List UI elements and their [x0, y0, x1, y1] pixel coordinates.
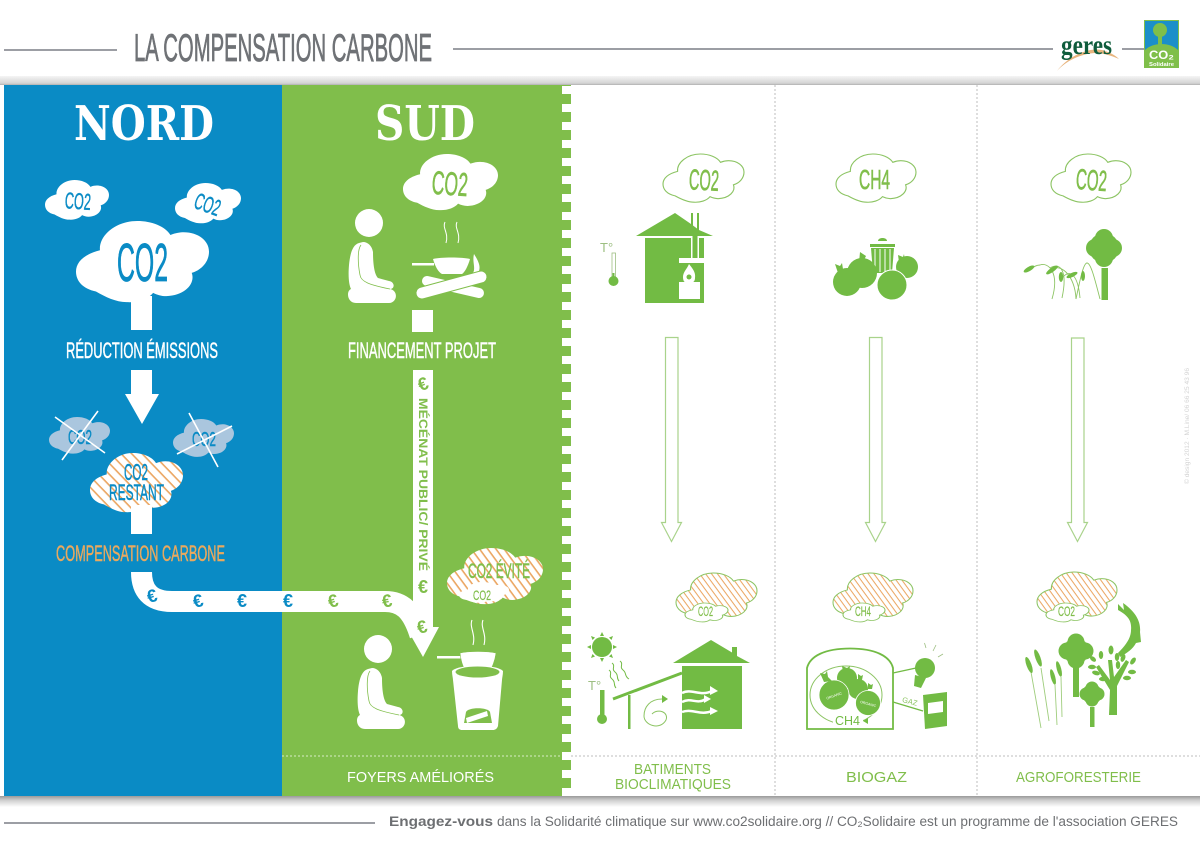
icon: thermometer, solar lean-to: T° — [588, 678, 601, 693]
euro symbols: € — [326, 590, 340, 612]
cloud: CO2 évité: CO2 — [473, 587, 491, 603]
icon: biogas digester: ORGANIC — [826, 691, 843, 701]
label: réduction émissions: RÉDUCTION ÉMISSIONS — [66, 338, 218, 363]
euro symbols: € — [191, 590, 205, 612]
title: LA COMPENSATION CARBONE — [134, 27, 432, 70]
crossed cloud right — [173, 413, 234, 467]
copyright: © design 2012 · M.Line/ 06 66 25 43 96 — [1183, 368, 1191, 484]
label: batiments bioclimatiques: BATIMENTS — [634, 761, 711, 778]
logo: CO2 Solidaire: CO₂ — [1149, 48, 1174, 62]
cloud: CO2 évité: CO2 ÉVITÉ — [468, 560, 530, 583]
cloud: CO2 — [1051, 154, 1131, 202]
icon: thermometer, solar lean-to — [588, 673, 682, 729]
footer — [0, 796, 1200, 829]
icon: gas stove — [923, 692, 947, 729]
crossed cloud left: CO2 — [68, 427, 92, 449]
footer: text: dans la Solidarité climatique sur www.co2solidaire.org // CO₂Solidaire est un programme de l'association GERES — [497, 814, 1178, 829]
main CO2 cloud with stem — [76, 221, 209, 330]
label: compensation carbone: COMPENSATION CARBONE — [56, 541, 225, 566]
icon: seated person, improved stove — [357, 635, 405, 729]
cloud: striped CH4: CH4 — [855, 603, 871, 619]
logo: CO2 Solidaire — [1144, 20, 1179, 68]
label: biogaz: BIOGAZ — [846, 769, 907, 786]
header band — [0, 48, 1200, 85]
column: bâtiments bioclimatiques — [587, 154, 757, 793]
icon: open fire with pot — [412, 222, 481, 293]
icon: trees — [1058, 634, 1137, 727]
euro symbols: € — [283, 591, 293, 611]
euro symbols: € — [380, 590, 394, 612]
icon: biogas digester: CH4 — [835, 713, 860, 728]
arrow: long down — [866, 338, 886, 542]
icon: light bulb — [914, 643, 943, 688]
heading: sud: SUD — [375, 96, 475, 152]
label: batiments bioclimatiques — [615, 761, 731, 793]
cloud: CO2 restant: CO2 — [124, 459, 148, 485]
dividers — [571, 85, 1200, 796]
logo: CO2 Solidaire: Solidaire — [1149, 62, 1174, 68]
column: biogaz — [807, 154, 947, 786]
label: financement projet: FINANCEMENT PROJET — [348, 338, 496, 363]
logo: geres: geres — [1061, 30, 1112, 60]
connector square — [412, 310, 433, 332]
cloud: CO2: CO2 — [1075, 164, 1108, 198]
cloud: CO2 restant — [90, 453, 183, 534]
cloud: striped CO2: CO2 — [1058, 603, 1075, 619]
cloud: striped CO2 — [676, 573, 757, 622]
icon: bioclimatic house — [673, 640, 750, 729]
cloud: CH4 — [836, 154, 916, 202]
label: gaz: GAZ — [901, 695, 919, 708]
icon: sun and rays — [587, 632, 629, 688]
label: mécénat public / privé: MÉCÉNAT PUBLIC/ PRIVÉ — [416, 398, 429, 571]
panel: sud — [282, 85, 571, 796]
footer: call to action: Engagez-vous — [389, 814, 493, 829]
small cloud right — [175, 183, 241, 223]
logo: geres — [1057, 30, 1119, 71]
icon: tree and bent wheat — [1023, 229, 1122, 300]
flow: euro pipe and arrow — [142, 370, 439, 657]
cloud: CO2 — [403, 154, 498, 210]
heading: nord: NORD — [74, 96, 214, 152]
cloud: CH4: CH4 — [859, 164, 890, 195]
label: foyers améliorés: FOYERS AMÉLIORÉS — [347, 769, 494, 786]
icon: thermometer — [600, 240, 618, 286]
euro symbols: € — [145, 585, 159, 607]
cloud: CO2 restant: RESTANT — [109, 480, 164, 505]
column: agroforesterie — [1016, 154, 1191, 786]
euro symbols: € — [418, 577, 428, 597]
icon: seated person — [348, 209, 396, 303]
icon: wheat — [1024, 649, 1063, 728]
icon: curved arrow — [1118, 603, 1141, 657]
arrow: long down — [662, 338, 682, 542]
panel: nord — [4, 85, 282, 796]
arrow: long down — [1068, 338, 1088, 542]
cloud: CO2 évité — [447, 548, 543, 604]
small cloud left: CO2 — [64, 187, 92, 215]
main CO2 cloud with stem: CO2 — [117, 233, 168, 293]
euro symbols: € — [237, 591, 247, 611]
euro symbols: € — [415, 616, 429, 638]
serrated edge — [562, 86, 571, 796]
icon: house with fire — [636, 213, 713, 303]
dotted divider foyers — [282, 755, 562, 757]
euro symbols — [145, 373, 431, 638]
euro symbols: € — [415, 373, 431, 395]
small cloud left — [45, 180, 109, 220]
cloud: striped CO2 — [1037, 572, 1117, 622]
crossed cloud left — [49, 411, 110, 460]
arrow: down — [125, 370, 159, 424]
icon: biogas digester — [807, 648, 923, 729]
crossed cloud right: CO2 — [192, 429, 216, 451]
small cloud right: CO2 — [191, 188, 224, 221]
label: batiments bioclimatiques: BIOCLIMATIQUES — [615, 776, 731, 793]
icon: thermometer: T° — [600, 240, 613, 255]
cloud: CO2: CO2 — [431, 164, 469, 203]
cloud: CO2 — [663, 154, 744, 202]
cloud: CO2: CO2 — [688, 164, 720, 198]
cloud: striped CH4 — [833, 573, 913, 622]
icon: biogas digester: ORGANIC — [860, 700, 877, 708]
cloud: striped CO2: CO2 — [698, 603, 713, 619]
icon: improved stove — [437, 620, 503, 730]
icon: trash can and bags — [833, 238, 918, 300]
label: agroforesterie: AGROFORESTERIE — [1016, 769, 1141, 786]
